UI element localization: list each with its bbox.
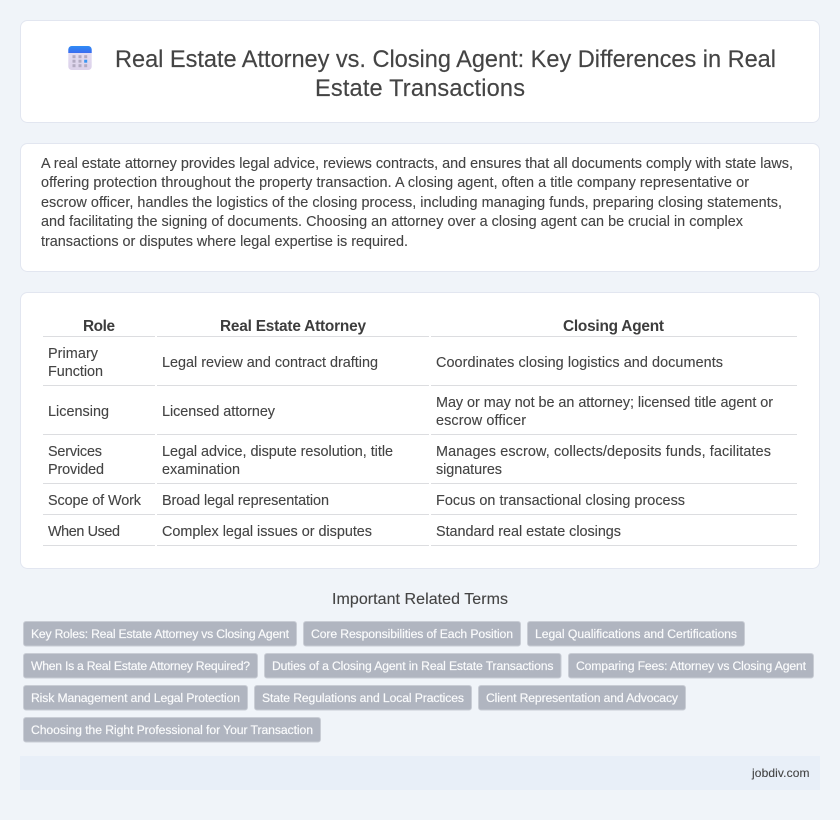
tag: core responsibilities <box>304 622 520 646</box>
row: primary function: Coordinates closing logistics and documents <box>436 355 723 371</box>
tag: legal qualifications: Legal Qualifications and Certifications <box>535 627 737 641</box>
row: services provided: Services <box>48 444 102 460</box>
tag: state regulations <box>254 686 472 710</box>
row: primary function <box>43 346 797 386</box>
footer <box>20 756 820 790</box>
intro paragraph: and facilitating the signing of documents. Choosing an attorney over a closing agent can be crucial in complex <box>41 214 744 230</box>
row: licensing <box>43 395 797 435</box>
title <box>115 47 776 102</box>
title: Real Estate Attorney vs. Closing Agent: Key Differences in Real <box>115 47 776 73</box>
row: licensing: escrow officer <box>436 413 526 429</box>
tag: when attorney required: When Is a Real Estate Attorney Required? <box>31 659 250 673</box>
tag: client representation <box>478 686 686 710</box>
tag: core responsibilities: Core Responsibilities of Each Position <box>311 627 513 641</box>
icon: calendar <box>68 46 92 70</box>
tag group: related terms <box>24 622 814 742</box>
row: scope of work: Scope of Work <box>48 493 142 509</box>
tag: comparing fees: Comparing Fees: Attorney vs Closing Agent <box>576 659 807 673</box>
tag: risk management <box>24 686 248 710</box>
row: primary function: Function <box>48 364 103 380</box>
tag: key roles: Key Roles: Real Estate Attorney vs Closing Agent <box>31 627 290 641</box>
intro paragraph: transactions or disputes where legal expertise is required. <box>41 234 408 250</box>
row: licensing: May or may not be an attorney; licensed title agent or <box>436 395 773 411</box>
table header row <box>43 318 797 337</box>
row: services provided: examination <box>162 462 240 478</box>
row: when used: Standard real estate closings <box>436 524 621 540</box>
tag: choosing the right professional <box>24 718 320 742</box>
tag: when attorney required <box>24 654 258 678</box>
row: when used <box>43 524 797 546</box>
tag: legal qualifications <box>528 622 744 646</box>
tag: state regulations: State Regulations and Local Practices <box>262 691 464 705</box>
row: licensing: Licensing <box>48 404 109 420</box>
intro paragraph: A real estate attorney provides legal advice, reviews contracts, and ensures that all documents comply with state laws, <box>41 156 793 172</box>
row: services provided: Provided <box>48 462 104 478</box>
tag: duties of closing agent: Duties of a Closing Agent in Real Estate Transactions <box>272 659 554 673</box>
tag: choosing the right professional: Choosing the Right Professional for Your Transaction <box>31 723 313 737</box>
row: services provided: Legal advice, dispute resolution, title <box>162 444 393 460</box>
intro paragraph: offering protection throughout the property transaction. A closing agent, often a title company representative or <box>41 175 749 191</box>
tag: key roles <box>24 622 296 646</box>
table header row: Closing Agent <box>563 318 664 335</box>
row: primary function: Legal review and contract drafting <box>162 355 378 371</box>
heading: important related terms: Important Related Terms <box>332 591 508 608</box>
panel: title header <box>20 20 820 122</box>
panel: comparison table <box>20 292 820 568</box>
intro paragraph: escrow officer, handles the logistics of the closing process, including managing funds, preparing closing statements, <box>41 195 782 211</box>
tag: comparing fees <box>568 654 814 678</box>
row: scope of work: Broad legal representation <box>162 493 329 509</box>
row: scope of work: Focus on transactional closing process <box>436 493 685 509</box>
intro paragraph <box>41 156 793 250</box>
row: when used: When Used <box>48 524 120 540</box>
table header row: Real Estate Attorney <box>220 318 366 335</box>
panel: introduction <box>20 144 820 272</box>
row: services provided <box>43 444 797 484</box>
title: Estate Transactions <box>315 76 525 102</box>
table header row: Role <box>83 318 115 335</box>
footer source: jobdiv.com <box>751 766 810 780</box>
tag: duties of closing agent <box>264 654 561 678</box>
row: licensing: Licensed attorney <box>162 404 276 420</box>
row: services provided: signatures <box>436 462 502 478</box>
row: scope of work <box>43 493 797 515</box>
tag: risk management: Risk Management and Legal Protection <box>31 691 240 705</box>
row: when used: Complex legal issues or disputes <box>162 524 372 540</box>
tag: client representation: Client Representation and Advocacy <box>486 691 679 705</box>
row: primary function: Primary <box>48 346 99 362</box>
row: services provided: Manages escrow, collects/deposits funds, facilitates <box>436 444 771 460</box>
